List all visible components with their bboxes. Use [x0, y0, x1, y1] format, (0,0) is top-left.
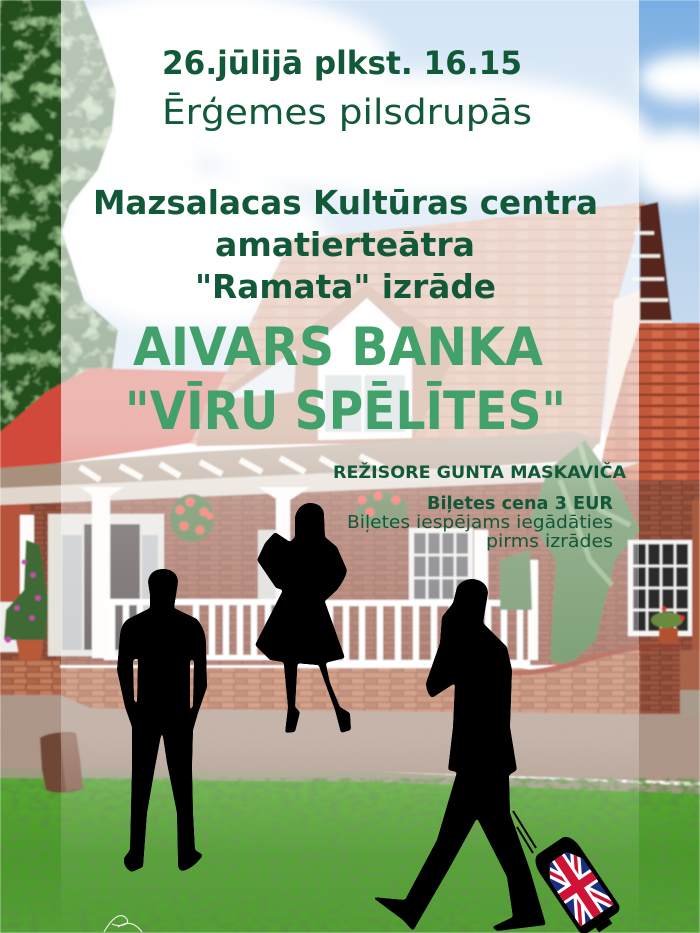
organiser heading: "Ramata" izrāde	[195, 267, 496, 306]
silhouette: standing man	[117, 569, 207, 872]
play title: AIVARS BANKA	[133, 317, 543, 378]
date heading: 26.jūlijā plkst. 16.15	[162, 44, 522, 82]
play title	[125, 317, 566, 442]
ticket information: Biļetes cena 3 EUR	[427, 493, 613, 514]
left lower roof	[0, 368, 240, 472]
silhouette: man on phone with suitcase	[372, 579, 626, 933]
brick walls	[0, 480, 700, 665]
play title: "VĪRU SPĒLĪTES"	[125, 380, 566, 442]
venue heading: Ērģemes pilsdrupās	[162, 92, 532, 133]
curb	[0, 768, 700, 797]
sky with clouds	[0, 0, 700, 430]
porch eave	[0, 432, 640, 505]
balustrade	[104, 599, 530, 668]
woman: left leg and shoe	[283, 655, 300, 733]
lawn debris	[104, 916, 142, 932]
suitcase handle	[513, 811, 536, 853]
paving	[0, 690, 700, 786]
porch pillars	[20, 487, 538, 660]
right lower roof	[590, 323, 700, 522]
ticket information	[347, 493, 613, 552]
woman: right leg and shoe	[315, 655, 351, 733]
ticket information: pirms izrādes	[486, 531, 613, 552]
lawn	[0, 778, 700, 933]
organiser heading: Mazsalacas Kultūras centra	[93, 183, 598, 222]
garden wall	[0, 645, 700, 717]
dormer window	[196, 284, 458, 446]
climbing plant and flower pot at left	[0, 540, 48, 661]
window flower pot	[651, 606, 684, 643]
main roof	[190, 202, 645, 444]
ticket information: Biļetes iespējams iegādāties	[347, 512, 613, 533]
right window	[628, 500, 700, 670]
tree stump	[40, 732, 83, 793]
organiser heading: amatierteātra	[215, 225, 475, 264]
right gable	[604, 202, 672, 440]
organiser heading	[93, 183, 598, 306]
porch window	[258, 528, 473, 602]
tree at left	[0, 0, 118, 432]
silhouette: woman with bag	[255, 503, 351, 733]
french door	[48, 514, 164, 656]
director credit: REŽISORE GUNTA MASKAVIČA	[333, 461, 627, 483]
hanging flowers	[170, 492, 408, 542]
palm plant at right	[500, 440, 640, 665]
suitcase with union jack	[536, 836, 620, 933]
